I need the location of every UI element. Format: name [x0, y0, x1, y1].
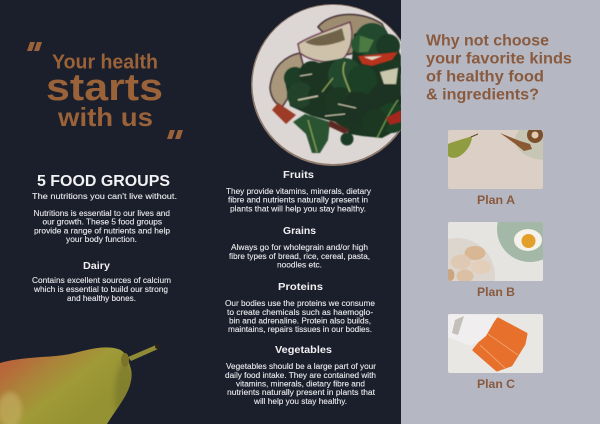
panel: grey right column: [401, 0, 600, 424]
heading: 5 food groups: 5 FOOD GROUPS: [37, 173, 170, 190]
icon: closing quote mark: [167, 130, 183, 139]
image: salad plate: [251, 4, 415, 166]
heading: why not choose: of healthy food: [426, 68, 544, 86]
text block: 5 food groups intro: [32, 173, 177, 244]
plan A card: [448, 130, 543, 204]
kale leaves: [284, 23, 407, 153]
heading: Proteins: Proteins: [278, 281, 323, 293]
quote block heading: [27, 42, 183, 139]
paragraph: Dairy: which is essential to build our strong: [33, 284, 168, 294]
plan B card: [448, 222, 543, 296]
paragraph: Dairy: and healthy bones.: [67, 293, 136, 303]
heading: Grains: Grains: [283, 225, 316, 237]
heading: with us: with us: [57, 102, 153, 132]
plate rim: [251, 4, 415, 166]
paragraph: Vegetables: will help you stay healthy.: [253, 396, 347, 406]
heading: Fruits: Fruits: [283, 169, 314, 181]
paragraph: Grains: noodles etc.: [277, 260, 322, 270]
red peppers: [272, 52, 401, 134]
image: eggs and fried egg: [448, 222, 543, 281]
label: Plan C: Plan C: [477, 377, 515, 391]
icon: opening quote mark: [27, 42, 42, 51]
label: Plan B: Plan B: [477, 285, 515, 299]
panel: dark background: [0, 0, 401, 424]
paragraph: Grains: Always go for wholegrain and/or high: [231, 242, 368, 252]
paragraph: Fruits: plants that will help you stay healthy.: [230, 203, 366, 213]
text block: Dairy: [32, 260, 171, 303]
paragraph: Fruits: [226, 186, 372, 213]
paragraph: Vegetables: daily food intake. They are contained with: [225, 370, 376, 380]
heading: Vegetables: Vegetables: [275, 344, 332, 356]
label: Plan A: Plan A: [477, 193, 515, 207]
image: salmon fillet: [448, 314, 543, 373]
paragraph: Proteins: maintains, repairs tissues in our bodies.: [228, 324, 372, 334]
paragraph: Vegetables: Vegetables should be a large part of your: [226, 361, 376, 371]
text block: Fruits: [226, 169, 372, 213]
heading: why not choose: [426, 32, 572, 104]
paragraph: Proteins: to create chemicals such as haemoglo-: [227, 307, 373, 317]
paragraph: Grains: fibre types of bread, rice, cereal, pasta,: [229, 251, 370, 261]
heading: why not choose: & ingredients?: [426, 86, 539, 104]
paragraph: Grains: [229, 242, 370, 270]
paragraph: Proteins: bin and adrenaline. Protein also builds,: [229, 316, 371, 326]
intro paragraph: your body function.: [66, 234, 137, 244]
paragraph: Dairy: [32, 275, 171, 303]
heading: why not choose: your favorite kinds: [426, 50, 572, 68]
paragraph: Proteins: [225, 298, 375, 334]
paragraph: Vegetables: nutrients naturally present in plants that: [227, 387, 376, 397]
subheading: The nutritions you can't live without.: [32, 191, 177, 201]
paragraph: Dairy: Contains excellent sources of calcium: [32, 275, 171, 285]
text block: Vegetables: [225, 344, 376, 406]
intro paragraph: our growth. These 5 food groups: [42, 217, 162, 227]
paragraph: Fruits: They provide vitamins, minerals, dietary: [226, 186, 372, 196]
intro paragraph: provide a range of nutrients and help: [34, 225, 170, 235]
eggplant slices: [270, 15, 392, 107]
heading: Your health: Your health: [52, 52, 158, 74]
paragraph: Proteins: Our bodies use the proteins we consume: [225, 298, 375, 308]
image: pear: [0, 340, 160, 424]
intro paragraph: Nutritions is essential to our lives and: [34, 208, 170, 218]
plan C card: [448, 314, 543, 391]
image: pear and spoon: [448, 130, 543, 189]
paragraph: Vegetables: vitamins, minerals, dietary fibre and: [236, 378, 365, 388]
paragraph: Fruits: fibre and nutrients naturally present in: [228, 195, 368, 205]
heading: Dairy: Dairy: [83, 260, 110, 272]
heading: starts: starts: [46, 67, 163, 109]
heading: why not choose: Why not choose: [426, 32, 549, 50]
intro paragraph: [34, 208, 170, 244]
paragraph: Vegetables: [225, 361, 376, 406]
text block: Grains: [229, 225, 370, 270]
text block: Proteins: [225, 281, 375, 334]
